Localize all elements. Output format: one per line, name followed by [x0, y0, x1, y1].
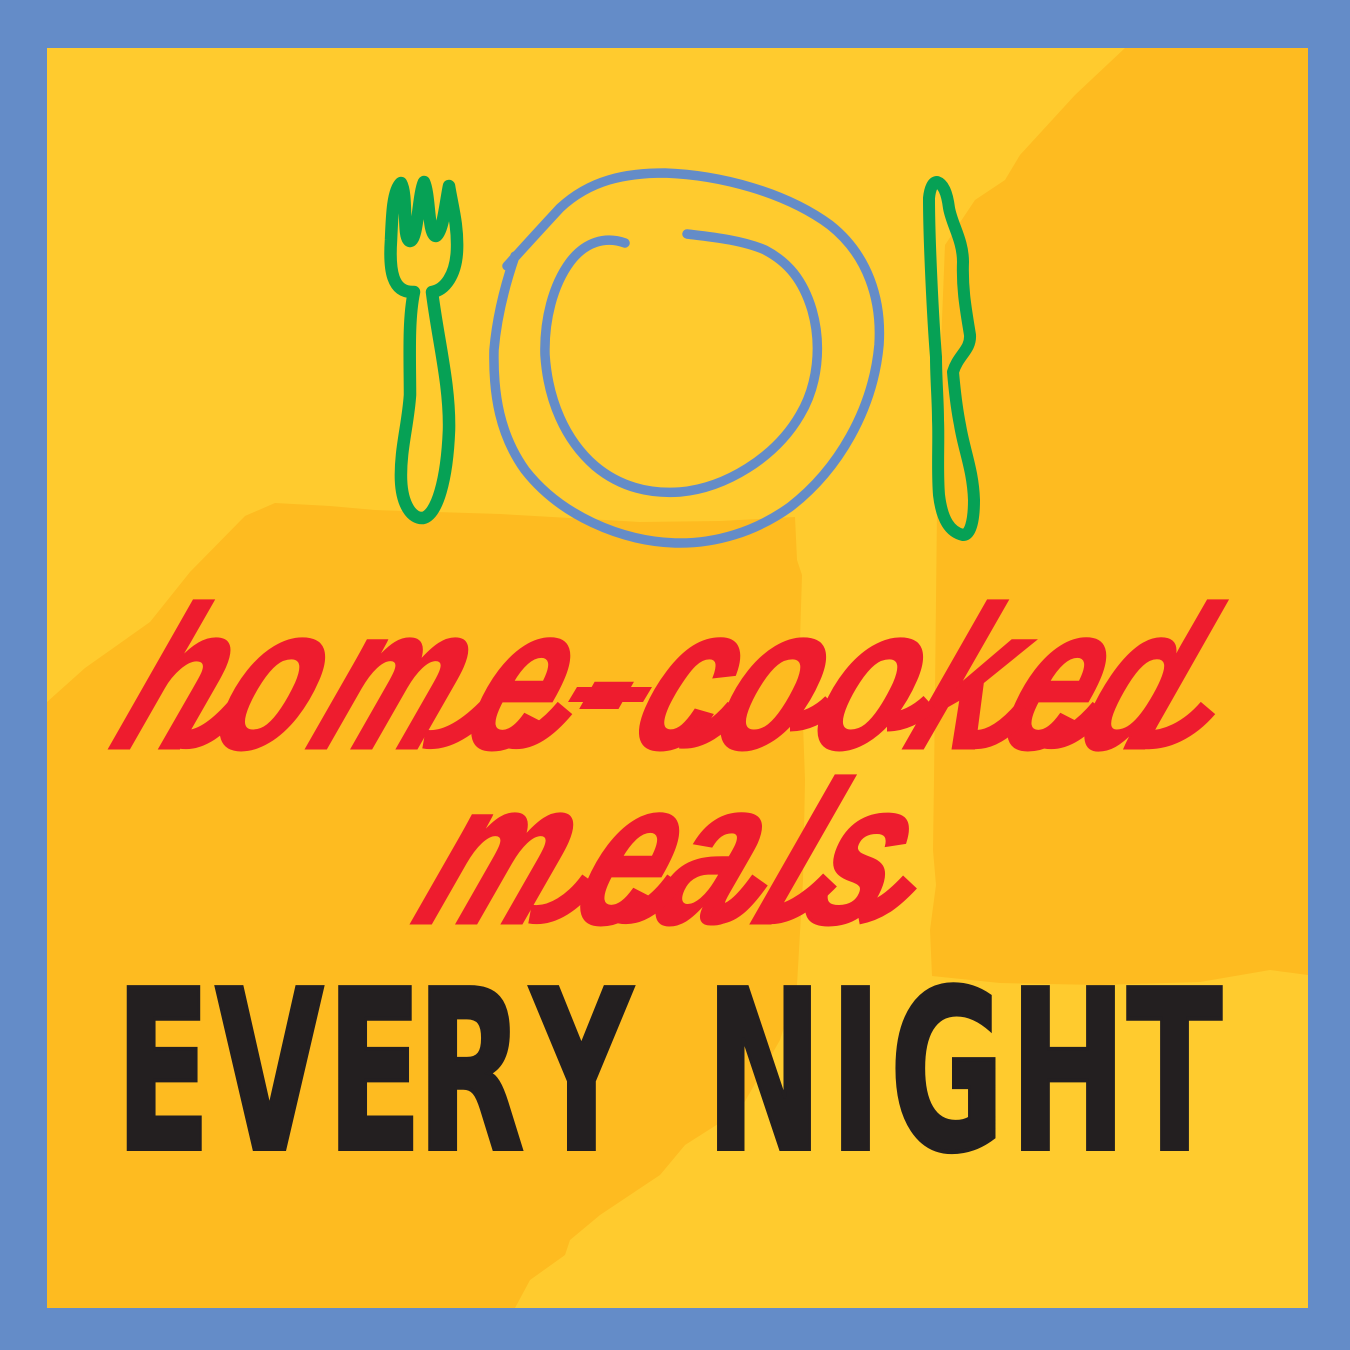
heading: home-cooked: home-cooked	[88, 564, 1243, 791]
icon: fork	[390, 182, 457, 518]
icon: plate	[494, 173, 879, 543]
script dash	[568, 687, 652, 702]
icon: knife	[929, 182, 974, 535]
heading: meals: meals	[390, 739, 955, 966]
script connector strokes	[180, 703, 1208, 740]
heading: EVERY NIGHT: EVERY NIGHT	[115, 943, 1222, 1202]
darker brush area: left	[47, 503, 805, 1308]
plate inner ring	[545, 234, 817, 492]
plate outer rim	[494, 173, 879, 543]
darker brush area: right	[930, 48, 1308, 985]
script connector strokes	[530, 880, 910, 915]
